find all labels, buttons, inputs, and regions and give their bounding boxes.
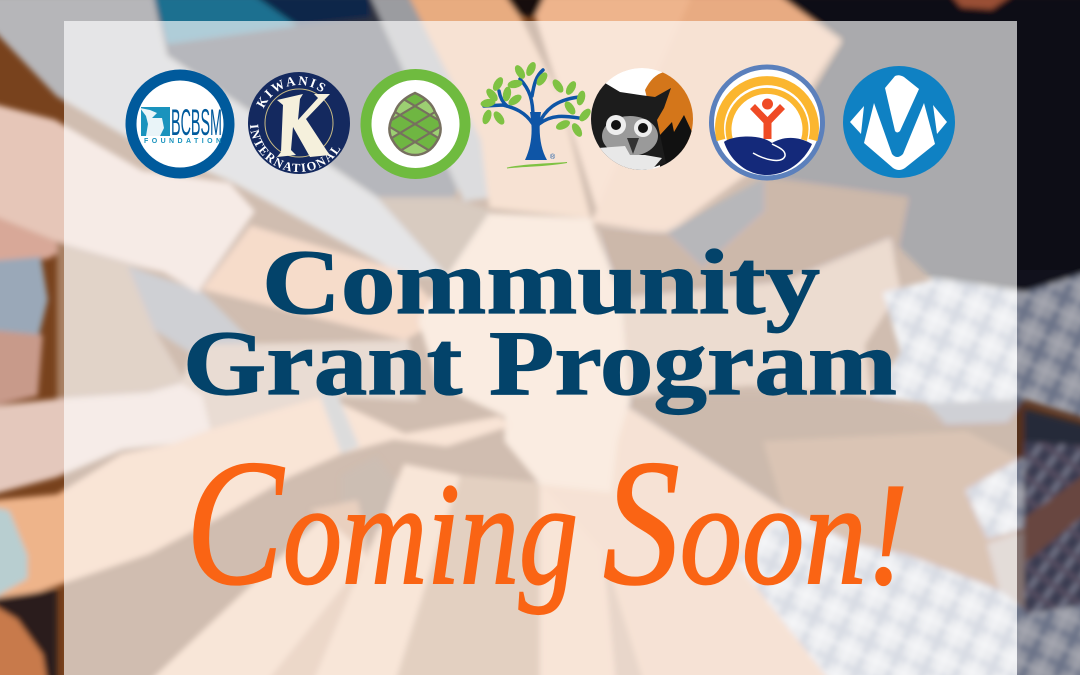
logo: owl bbox=[591, 68, 693, 170]
leather band and bracelets bbox=[341, 456, 397, 531]
title line 2: Grant Program bbox=[183, 312, 897, 414]
logo: Kiwanis International bbox=[248, 72, 350, 174]
logo: pine cone bbox=[366, 70, 465, 178]
grey sleeve with cuff bbox=[370, 0, 489, 201]
blue sleeve bbox=[0, 507, 28, 599]
top arms bbox=[408, 0, 591, 218]
dark object behind wrist bbox=[666, 178, 764, 267]
logo: BCBSM Foundation: FOUNDATION bbox=[144, 138, 221, 145]
logo: M mark bbox=[843, 66, 955, 178]
grey sleeve arm bbox=[0, 0, 447, 276]
tagline: Coming Soon! bbox=[186, 423, 908, 622]
plaid sleeves bbox=[872, 272, 1080, 419]
dark jumper top right bbox=[764, 0, 1080, 300]
pink upper sleeve bbox=[0, 104, 255, 292]
pink upper sleeve forearm bbox=[202, 225, 447, 340]
left shorts bbox=[57, 242, 195, 401]
watch forearm sleeve bbox=[0, 384, 210, 494]
logo: Kiwanis International: KIWANIS bbox=[256, 76, 326, 108]
logo: United Way bbox=[712, 67, 822, 178]
logo: BCBSM Foundation bbox=[131, 75, 229, 173]
tagline word: Soon!: Soon! bbox=[603, 423, 908, 622]
logo: tree bbox=[480, 61, 593, 168]
watch forearm bbox=[0, 396, 510, 604]
centre hands bbox=[418, 213, 629, 492]
title line 1: Community bbox=[262, 231, 820, 333]
title: Community Grant Program bbox=[183, 231, 897, 414]
right side cuff and hand bbox=[988, 531, 1024, 618]
logo: Kiwanis International: INTERNATIONAL bbox=[250, 124, 340, 172]
right forearm bbox=[611, 239, 900, 396]
wood lower right bbox=[617, 396, 1024, 513]
logo row: BCBSM bbox=[171, 102, 222, 143]
lower arms bbox=[145, 513, 370, 675]
wood bbox=[394, 475, 540, 675]
torso top bbox=[153, 0, 475, 198]
logo: tree: ® bbox=[550, 153, 556, 161]
far right strip bbox=[1024, 409, 1080, 447]
tagline word: Coming: Coming bbox=[186, 423, 578, 622]
watch bbox=[320, 393, 359, 454]
logo row bbox=[126, 62, 955, 180]
